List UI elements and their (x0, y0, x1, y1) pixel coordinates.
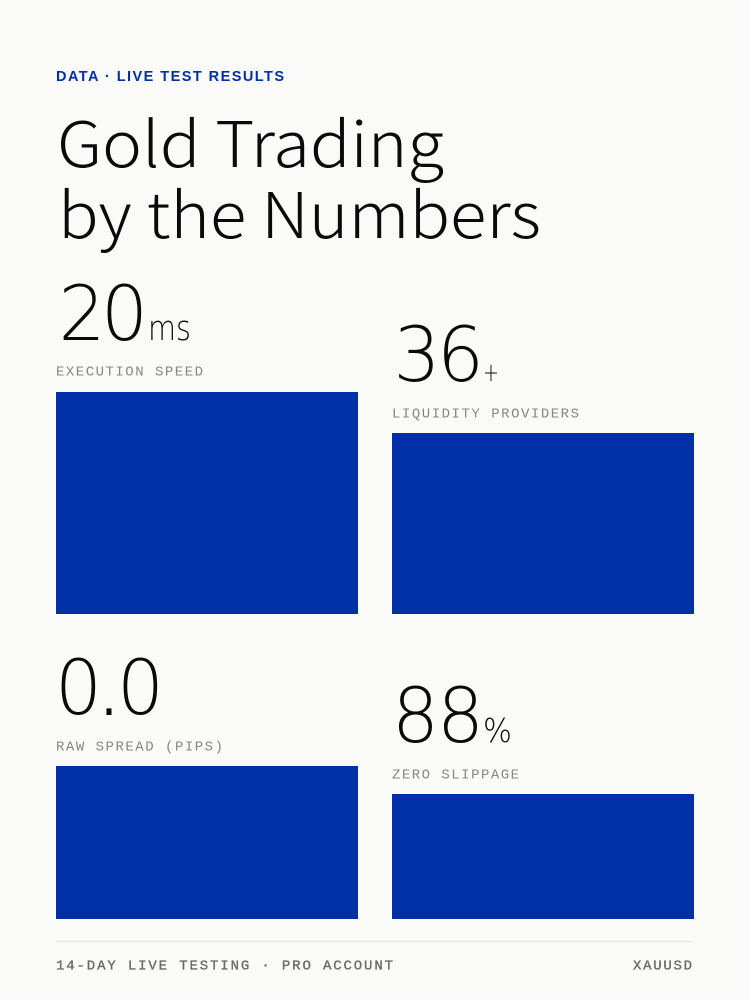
stat: 20ms: ms (148, 309, 191, 349)
panel: raw spread (55, 643, 358, 919)
panel: execution speed (56, 269, 358, 614)
stat: 20ms: 0 (101, 269, 148, 358)
panel: zero slippage (392, 671, 694, 919)
stat: 36+: + (483, 358, 499, 388)
stat: 36+: 3 (394, 310, 440, 399)
footer note: 14-DAY LIVE TESTING · PRO ACCOUNT (56, 958, 393, 974)
stat: 88%: % (483, 711, 512, 750)
title: by the Numbers (58, 166, 541, 257)
label: raw spread: RAW SPREAD (PIPS) (56, 740, 223, 756)
label: liquidity providers: LIQUIDITY PROVIDERS (392, 406, 579, 422)
eyebrow: DATA · LIVE TEST RESULTS (56, 69, 284, 85)
footer (56, 941, 694, 974)
stat: 0.0 (55, 643, 164, 732)
title (57, 95, 541, 257)
stat: 88%: 8 (437, 671, 484, 760)
title: Gold Trading (57, 95, 444, 186)
stat: 36+ (394, 310, 499, 399)
footer ticker: XAUUSD (633, 958, 692, 974)
bar: liquidity providers (392, 433, 694, 614)
label: execution speed: EXECUTION SPEED (56, 364, 203, 380)
stat: 0.0: 0 (117, 643, 164, 732)
stat: 88% (392, 671, 512, 760)
stat: 88%: 8 (392, 671, 439, 760)
stat: 20ms: 2 (58, 269, 106, 358)
label: zero slippage: ZERO SLIPPAGE (392, 768, 519, 784)
stat: 0.0: . (98, 643, 120, 732)
stat: 36+: 6 (437, 310, 484, 399)
bar: zero slippage (392, 794, 694, 919)
bar: execution speed (56, 392, 358, 614)
stat: 20ms (58, 269, 191, 358)
stat: 0.0: 0 (55, 643, 102, 732)
bar: raw spread (56, 766, 358, 919)
panel: liquidity providers (392, 310, 694, 614)
